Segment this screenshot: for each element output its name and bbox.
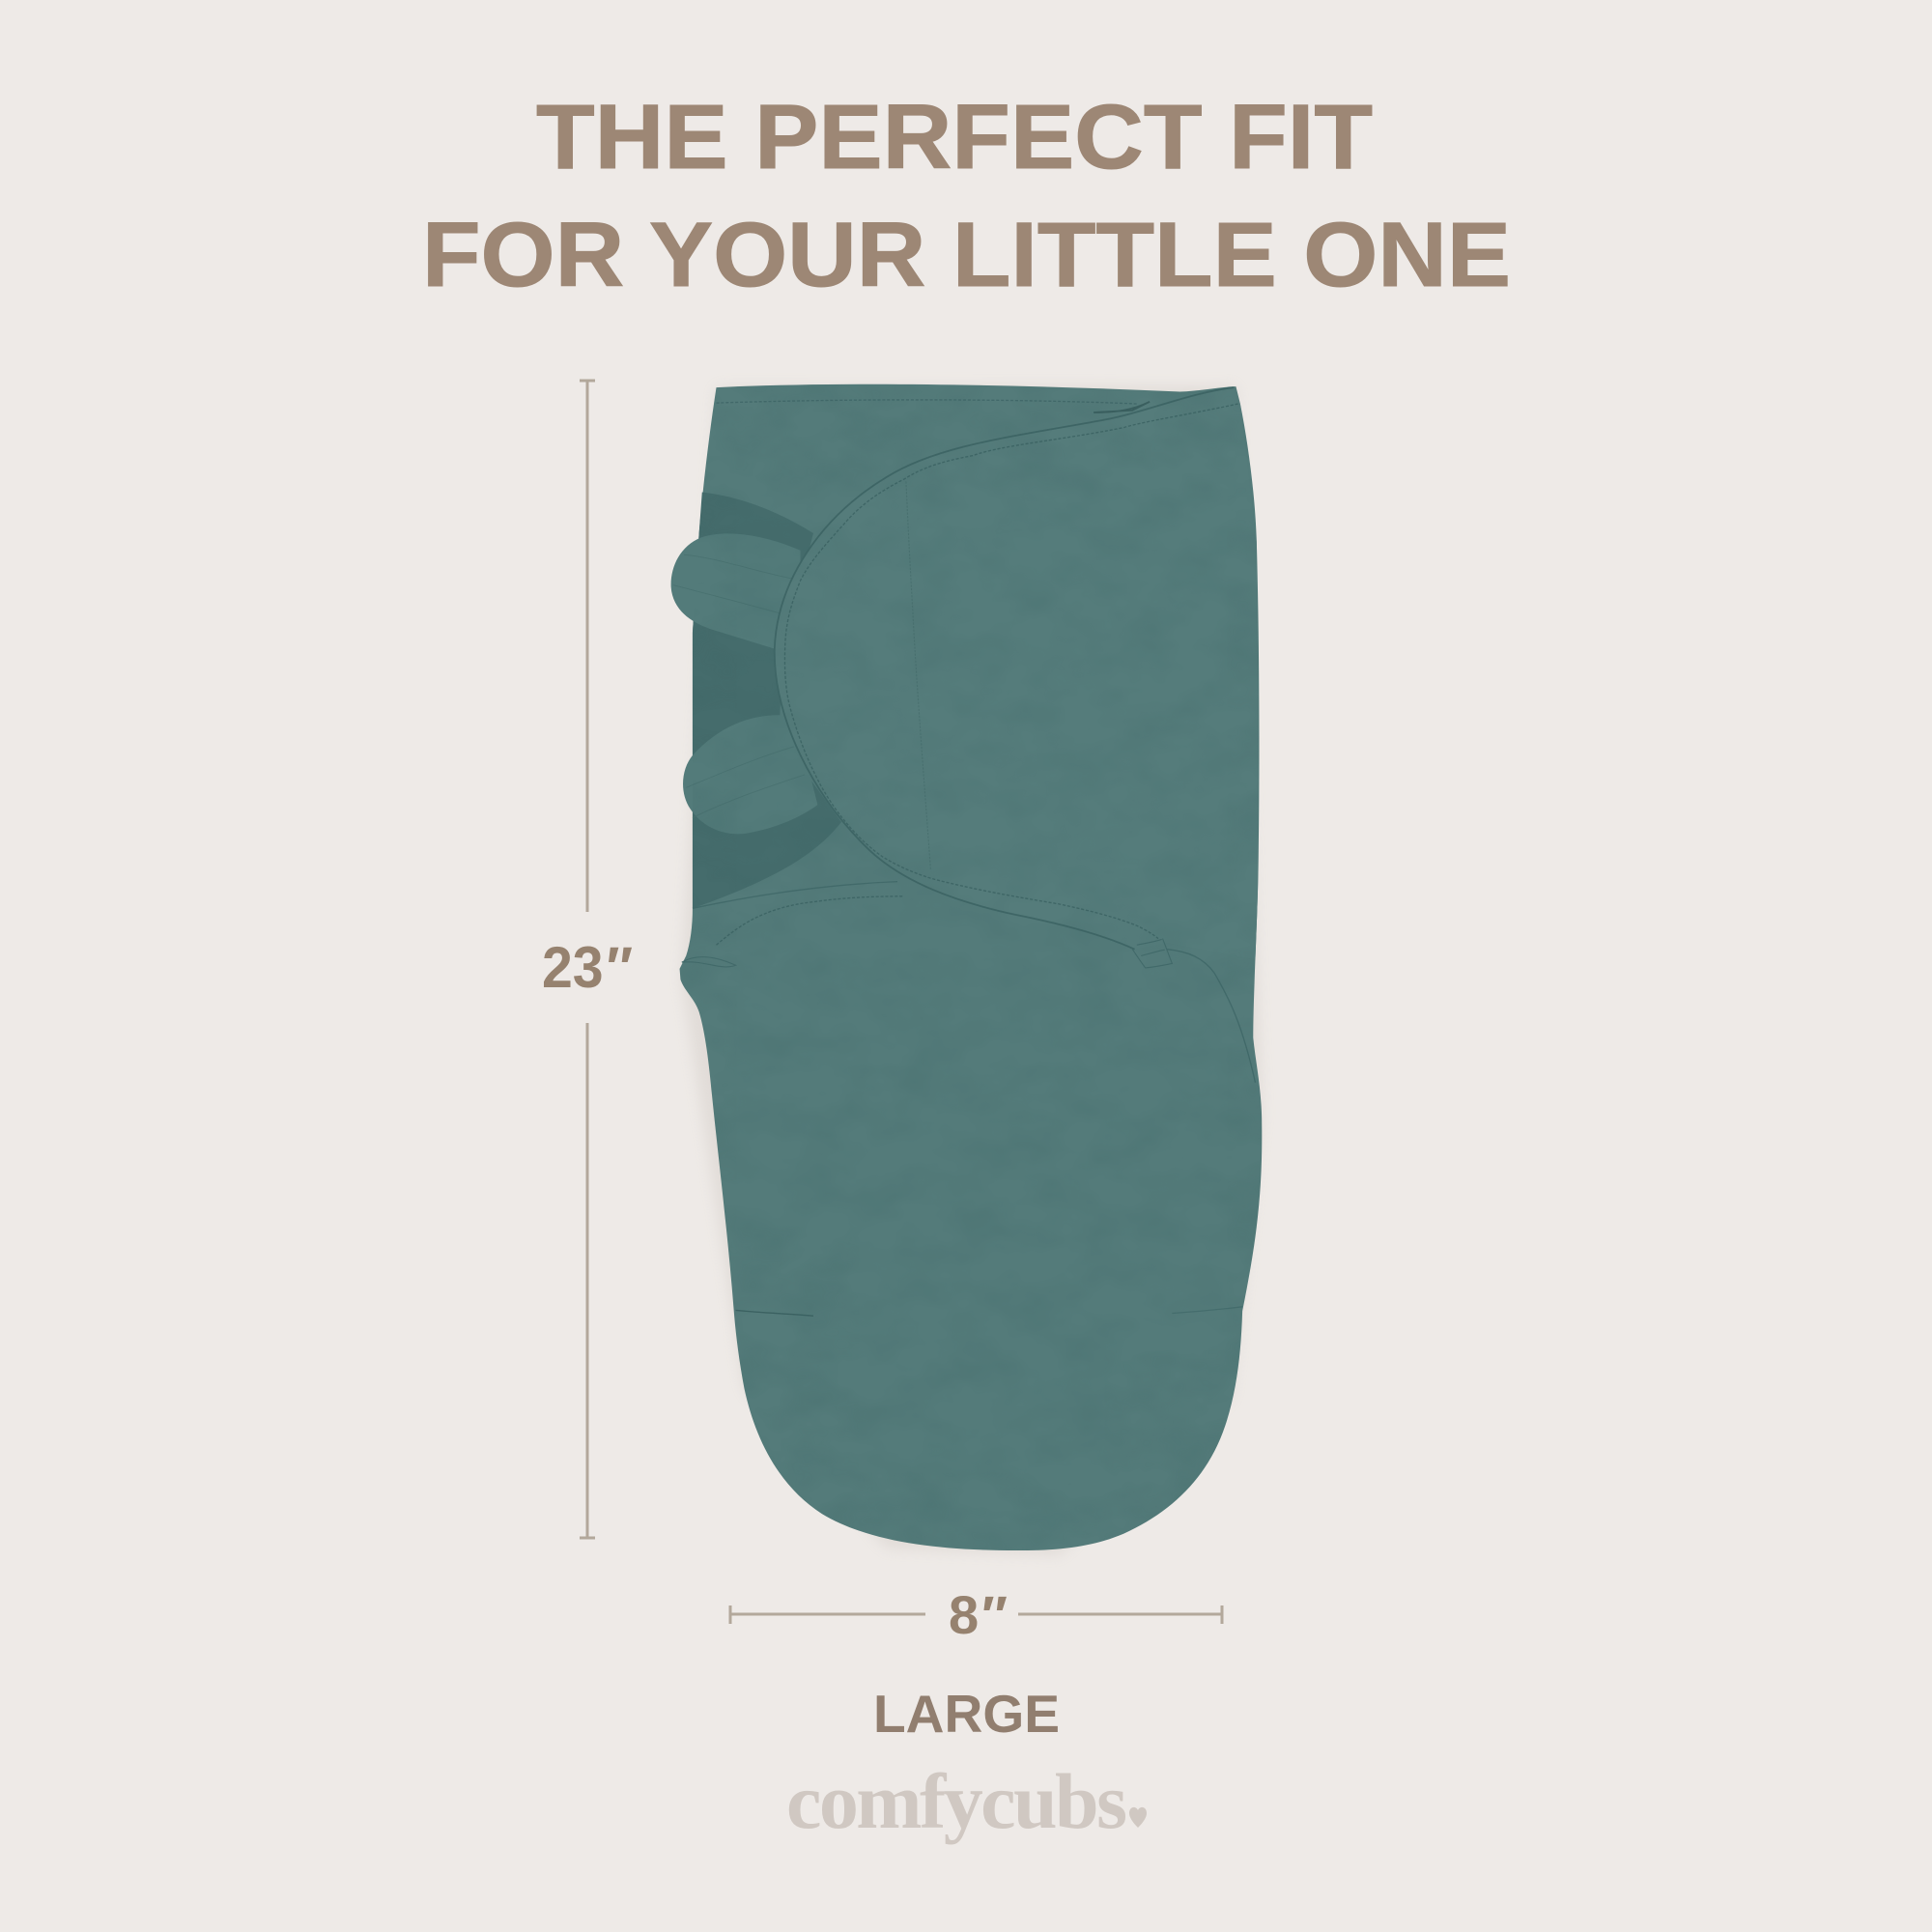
infographic canvas: [428, 104, 1508, 1845]
foot pocket seams: [736, 1307, 1242, 1316]
flap edge: [775, 387, 1234, 950]
soft shadow: [682, 386, 1262, 1555]
upper side tab: [671, 533, 801, 649]
flap stitching: [784, 404, 1238, 939]
flap centre seam: [906, 481, 930, 869]
title: THE PERFECT FIT: [536, 86, 1373, 188]
dark inner lining: [693, 493, 841, 908]
title: [422, 86, 1511, 306]
lower side tab: [683, 715, 817, 834]
swaddle body: [680, 384, 1262, 1550]
icon: heart: [1129, 1807, 1147, 1828]
size label: LARGE: [873, 1684, 1060, 1744]
height dimension: 23 inches: [542, 381, 632, 1538]
lower panel band: [682, 882, 1256, 1083]
fabric mottling: [1197, 390, 1198, 391]
width dimension: 8 inches: 8″: [949, 1584, 1007, 1645]
top back band: [717, 400, 1150, 412]
swaddle product illustration: [671, 374, 1275, 1564]
width dimension: 8 inches: [730, 1584, 1222, 1645]
title: FOR YOUR LITTLE ONE: [422, 204, 1511, 306]
brand logo: comfycubs: [786, 1757, 1127, 1845]
wrap-over flap: [775, 387, 1259, 960]
height dimension: 23 inches: 23″: [542, 935, 632, 1000]
